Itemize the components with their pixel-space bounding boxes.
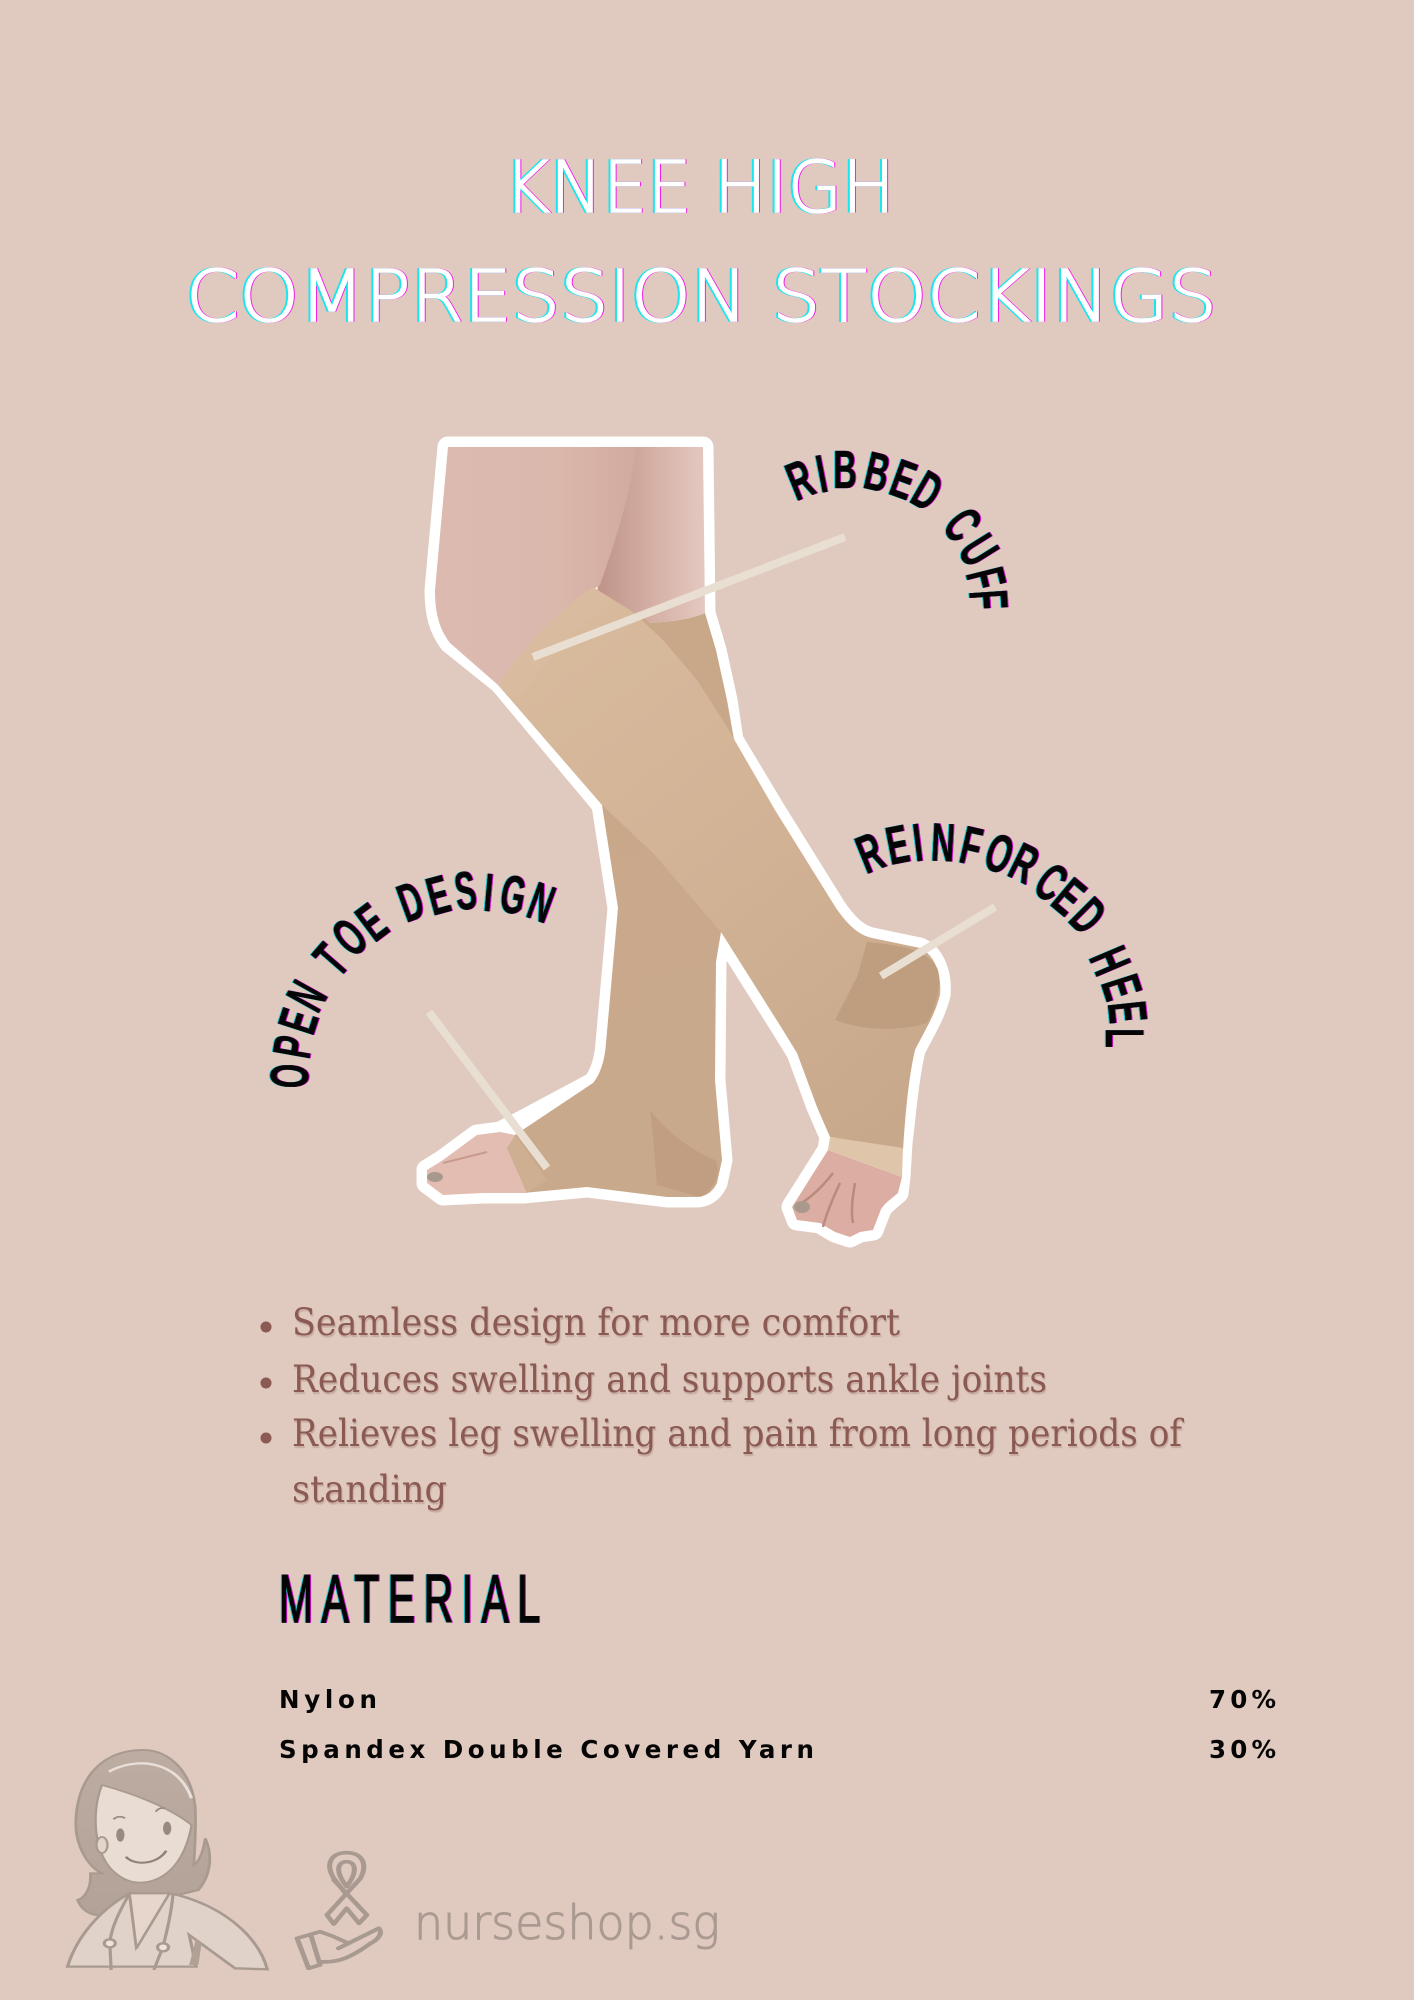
back foot toe line — [443, 1152, 487, 1163]
material table: 70% — [1209, 1685, 1276, 1714]
label: reinforced heel: N — [930, 813, 956, 874]
label: open toe design: E — [346, 893, 399, 953]
label: reinforced heel: C — [1023, 852, 1078, 914]
cuff ribbing — [498, 587, 612, 698]
label: open toe design: E — [267, 1002, 331, 1041]
label: open toe design: I — [482, 863, 495, 924]
label: reinforced heel: E — [1041, 868, 1096, 927]
label: open toe design: G — [496, 864, 530, 927]
hand — [297, 1928, 380, 1968]
brows — [113, 1808, 165, 1819]
title — [186, 146, 1217, 338]
label: reinforced heel: F — [955, 816, 987, 878]
ear — [96, 1837, 107, 1853]
label: reinforced heel: E — [1089, 968, 1152, 1007]
front leg stocking — [498, 587, 940, 1150]
label: ribbed cuff: E — [883, 449, 923, 512]
bullet list — [260, 1301, 1184, 1511]
label: open toe design: N — [520, 871, 562, 935]
callout lines — [429, 537, 995, 1168]
bullet list: standing — [292, 1468, 447, 1511]
label: ribbed cuff: F — [957, 588, 1018, 612]
front toe separators — [795, 1173, 855, 1227]
label: reinforced heel: O — [977, 822, 1021, 887]
label: open toe design: O — [321, 907, 379, 968]
material table: Nylon — [279, 1685, 377, 1714]
heading: material: MATERIAL — [279, 1560, 540, 1637]
back thigh — [596, 447, 705, 632]
front toenail — [794, 1201, 810, 1213]
back heel gusset — [650, 1110, 718, 1197]
label: ribbed cuff — [778, 441, 1018, 612]
collar v — [130, 1893, 169, 1948]
back toenail — [427, 1172, 443, 1182]
material table: 30% — [1209, 1735, 1276, 1764]
material table — [279, 1685, 1276, 1764]
label: reinforced heel: L — [1094, 1028, 1153, 1048]
back leg stocking — [507, 606, 735, 1197]
label: ribbed cuff: R — [778, 449, 822, 513]
label: open toe design: S — [451, 860, 480, 923]
front thigh — [435, 447, 636, 685]
bullet list: Reduces swelling and supports ankle joints — [292, 1358, 1047, 1401]
material table: Spandex Double Covered Yarn — [279, 1735, 814, 1764]
reinforced heel patch — [835, 942, 939, 1029]
front foot toe band — [828, 1137, 903, 1177]
ribbon and hand logo — [297, 1853, 380, 1968]
label: ribbed cuff: B — [859, 441, 895, 504]
label: ribbed cuff: B — [833, 441, 857, 500]
back foot stocking band — [507, 1135, 547, 1193]
eyes — [116, 1828, 124, 1842]
label: open toe design: T — [303, 933, 361, 987]
label: reinforced heel: R — [848, 822, 892, 886]
stethoscope — [104, 1893, 173, 1970]
back foot skin — [427, 1132, 527, 1195]
label: ribbed cuff: D — [902, 460, 952, 523]
illustration: legs in compression stockings — [427, 447, 995, 1237]
label: reinforced heel — [848, 813, 1157, 1048]
label: open toe design: E — [421, 864, 456, 928]
label: open toe design: P — [262, 1031, 325, 1062]
label: reinforced heel: E — [1096, 998, 1157, 1026]
front toes — [792, 1150, 902, 1237]
label: reinforced heel: I — [910, 814, 926, 874]
label: reinforced heel: D — [1058, 887, 1117, 946]
label: reinforced heel: E — [881, 815, 914, 877]
label: open toe design — [260, 860, 562, 1090]
white sticker outline — [427, 447, 940, 1237]
label: ribbed cuff: C — [931, 498, 992, 553]
nurse mascot — [68, 1750, 267, 1970]
ribbon — [327, 1853, 367, 1924]
label: open toe design: N — [276, 972, 339, 1021]
shadow under arm — [189, 1938, 202, 1965]
label: ribbed cuff: F — [954, 562, 1016, 596]
brand text: nurseshop.sg — [414, 1896, 720, 1951]
bullet list: Relieves leg swelling and pain from long periods of — [292, 1412, 1184, 1455]
hair highlight — [109, 1763, 192, 1798]
label: open toe design: D — [390, 870, 432, 934]
title: COMPRESSION STOCKINGS — [186, 255, 1217, 338]
body — [68, 1893, 267, 1969]
label: reinforced heel: H — [1077, 939, 1141, 984]
bullet list: Seamless design for more comfort — [292, 1301, 900, 1344]
label: open toe design: O — [260, 1062, 321, 1090]
face — [96, 1785, 192, 1883]
label: ribbed cuff: I — [812, 445, 832, 505]
smile — [126, 1851, 166, 1863]
hair — [76, 1750, 210, 1915]
label: ribbed cuff: U — [947, 525, 1009, 576]
label: reinforced heel: R — [1000, 832, 1047, 896]
title: KNEE HIGH — [504, 146, 895, 229]
